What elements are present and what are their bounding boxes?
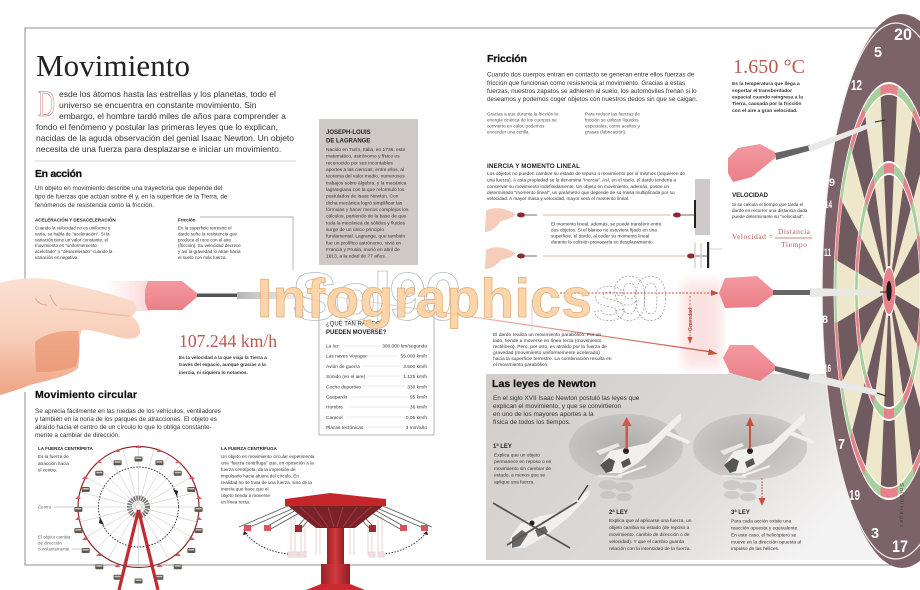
speed table rows: La luz xyxy=(326,344,339,350)
intro text: embargo, el hombre tardó miles de años para comprender a xyxy=(59,111,286,121)
direction arrows xyxy=(99,489,178,525)
board numbers: 8 xyxy=(822,314,828,326)
board numbers: 3 xyxy=(871,525,879,542)
newton intro: física de todos los tiempos. xyxy=(493,419,571,426)
Lagrange heading: DE LAGRANGE xyxy=(326,138,370,144)
Lagrange biography: Nacido en Turín, Italia, en 1736, este xyxy=(326,147,405,153)
segunda ley: 2ª LEY xyxy=(609,509,628,516)
speed table rows: 300.000 km/segundo xyxy=(382,344,427,350)
speed table rows: 55.000 km/h xyxy=(401,354,427,360)
newton intro: En el siglo XVII Isaac Newton postuló las leyes que xyxy=(493,395,640,402)
aceleración column: variación tiene un valor constante, el xyxy=(35,238,108,242)
fricción column: Fricción xyxy=(178,218,196,222)
primera ley: 1ª LEY xyxy=(493,443,512,450)
speed table rows: 3.500 km/h xyxy=(403,364,427,370)
intro text: necesita de una fuerza para desplazarse e iniciar un movimiento. xyxy=(36,144,281,154)
centrífuga heading: LA FUERZA CENTRÍFUGA xyxy=(221,444,278,451)
en acción body: tipo de fuerzas que actúan sobre él y, en la superficie de la Tierra, de xyxy=(35,194,228,200)
rim red ticks xyxy=(75,445,202,567)
target block xyxy=(695,179,710,235)
velocidad text: dardo en recorrer una distancia dada xyxy=(732,208,808,213)
centrífuga text: realidad no se trata de una fuerza, sino de la xyxy=(221,480,312,485)
en acción body: Un objeto en movimiento describe una trayectoria que depende del xyxy=(35,185,222,192)
arrow: heli up 2 xyxy=(746,417,754,449)
Lagrange biography: reconocido por sus incontables xyxy=(326,160,393,166)
board numbers: 5 xyxy=(874,44,882,61)
speed table rows: Las naves Voyager xyxy=(326,354,367,360)
inercia body: determinado "momento lineal", un parámetro que depende de su masa multiplicada por su xyxy=(487,190,675,195)
Lagrange biography: fórmulas y hacer menos complejos los xyxy=(326,207,409,213)
fricción column: dardo sufre la resistencia que xyxy=(178,232,238,236)
segunda ley: movimiento, cambio de dirección o de xyxy=(609,532,690,538)
aceleración column: acelerado" o "desacelerado" cuando la xyxy=(35,249,113,254)
panel: qué tan rápido pueden moverse xyxy=(319,305,434,435)
parabolic text: rectilíneo). Pero, por otro, es atraído por la fuerza de xyxy=(493,344,607,350)
inercia body: velocidad. A mayor masa y velocidad, mayor será el momento lineal. xyxy=(487,196,629,201)
speed table rows: 95 km/h xyxy=(410,394,427,400)
centrífuga text: en línea recta. xyxy=(221,500,250,504)
fricción body: fricción que funcionan como resistencia al movimiento. Gracias a estas xyxy=(487,80,685,87)
fricción column: y así la gravedad lo atrae hacia xyxy=(178,249,241,254)
Lagrange biography: toda la mecánica de sólidos y fluidos xyxy=(326,220,405,226)
velocidad formula: Tiempo xyxy=(781,240,807,249)
fricción column: En la superficie terrestre el xyxy=(178,226,232,230)
spokes xyxy=(78,447,198,567)
Lagrange heading: JOSEPH-LOUIS xyxy=(326,130,371,136)
velocidad formula xyxy=(732,227,812,249)
board numbers: 16 xyxy=(824,363,831,375)
aceleración column: movimiento es "uniformemente xyxy=(35,243,97,248)
dart: middle xyxy=(719,276,889,308)
parabolic text: hacia la superficie terrestre. La combinación resulta en xyxy=(493,356,612,362)
speed table rows: Hombre xyxy=(326,405,343,411)
fricción note right: grasas (lubricación). xyxy=(585,130,626,134)
speed table rows: Coche deportivo xyxy=(326,384,361,390)
speed table rows: 330 km/h xyxy=(407,384,427,390)
column and base xyxy=(327,525,344,565)
heading: las leyes de Newton: Las leyes de Newton xyxy=(492,378,596,390)
temperature caption: con el aire a gran velocidad. xyxy=(732,108,798,114)
watermark outline: Sol90 xyxy=(292,259,462,335)
board numbers: 14 xyxy=(825,199,832,211)
hub xyxy=(130,498,148,516)
speed table rows: 36 km/h xyxy=(410,405,427,411)
board numbers: 17 xyxy=(892,537,908,556)
centro label: Centro xyxy=(38,504,52,510)
centrífuga text: una "fuerza centrífuga" que, en oposición a la xyxy=(221,460,314,466)
ghost chairs xyxy=(288,515,384,557)
fricción body: Cuando dos cuerpos entran en contacto se generan entre ellos fuerzas de xyxy=(487,72,695,78)
seats xyxy=(244,525,428,532)
newton intro: explican el movimiento, y que se convirtieron xyxy=(493,403,622,410)
newton intro: en uno de los mayores aportes a la xyxy=(493,411,594,418)
board numbers: 11 xyxy=(824,247,831,259)
bowl xyxy=(288,506,383,528)
panel: Lagrange xyxy=(319,119,418,265)
parabolic text: el movimiento parabólico. xyxy=(493,362,548,368)
momentum transfer text: superficie, el dardo, al ceder su momento lineal xyxy=(551,234,649,238)
swing ride xyxy=(239,493,432,590)
watermark: Infographics xyxy=(257,267,592,329)
fricción body: deseamos y podemos coger objetos con nuestros dedos sin que se caigan. xyxy=(487,96,698,103)
speed table rows: 0,05 km/h xyxy=(406,415,427,421)
speed table heading: ¿QUÉ TAN RÁPIDO xyxy=(326,320,381,328)
fricción column: el suelo con más fuerza. xyxy=(178,255,227,260)
tercera ley: reacción opuesta y equivalente. xyxy=(731,526,798,532)
Lagrange biography: Francia y Prusia, murió en abril de xyxy=(326,247,400,253)
primera ley: aplique una fuerza. xyxy=(494,480,535,486)
momentum transfer text: durante la colisión provocaría su desplazamiento. xyxy=(551,240,654,244)
earth speed caption: Es la velocidad a la que viaja la Tierra a xyxy=(179,355,267,360)
velocidad text: Si se calcula el tiempo que tarda el xyxy=(732,202,803,207)
icon: helicopter reaction xyxy=(693,413,814,501)
heading: inercia: INERCIA Y MOMENTO LINEAL xyxy=(487,163,580,170)
centrífuga text: fuerza centrípeta, da la impresión de xyxy=(221,467,296,472)
gondolas xyxy=(74,456,203,584)
Lagrange biography: aportes a las ciencias, entre ellos, al xyxy=(326,167,404,173)
intro text: universo se encuentra en constante movimiento. Sin xyxy=(59,100,257,110)
inercia body: Los objetos no pueden cambiar su estado de reposo o movimiento por sí mismos (requieren de xyxy=(487,171,685,176)
centrífuga text: objeto tienda a moverse xyxy=(221,493,270,498)
centrípeta text: atracción hacia xyxy=(38,461,69,466)
parabolic text: lado, tiende a moverse en línea recta (movimiento xyxy=(493,338,602,344)
speed table heading: PUEDEN MOVERSE? xyxy=(326,330,387,336)
speed table rows: Caracol xyxy=(326,415,343,421)
intro text: nacidas de la aguda observación del genial Isaac Newton. Un objeto xyxy=(36,133,294,143)
Lagrange biography: fundamental. Lagrange, que también xyxy=(326,234,405,240)
fricción note left: encender una cerilla. xyxy=(487,130,530,134)
board numbers: 19 xyxy=(849,487,860,504)
temperature caption: soportar el transbordador xyxy=(732,88,792,94)
velocidad text: puede determinarse su "velocidad". xyxy=(732,214,804,219)
circular body: mente a cambiar de dirección. xyxy=(35,432,120,439)
primera ley: movimiento sin cambiar de xyxy=(494,466,551,472)
aceleración column: Cuando la velocidad no es uniforme y xyxy=(35,226,111,230)
centrífuga text: impulsarlo hacia afuera del círculo. En xyxy=(221,474,299,478)
credit: Sol90images xyxy=(898,483,904,527)
parabolic text: El dardo realiza un movimiento parabólico. Por un xyxy=(493,332,601,338)
panel: las leyes de Newton background xyxy=(486,374,897,560)
temperature caption: Tierra, causada por la fricción xyxy=(732,101,802,107)
earth speed caption: inercia, ni siquiera lo notamos. xyxy=(179,370,248,375)
Lagrange biography: teorema del valor medio, numerosos xyxy=(326,174,405,180)
dart: upper xyxy=(728,120,885,182)
aceleración column: variación es negativa. xyxy=(35,255,79,260)
watermark outline xyxy=(292,259,668,335)
value: 1.650 °C xyxy=(732,56,805,114)
fricción note left: convierte en calor, podemos xyxy=(487,124,545,128)
en acción body: fenómenos de resistencia como la fricción. xyxy=(35,202,154,209)
board numbers xyxy=(822,25,912,556)
velocidad heading: VELOCIDAD xyxy=(732,192,769,199)
fricción note right: fricción se utilizan líquidos xyxy=(585,118,639,122)
small dart top xyxy=(517,212,694,218)
centrífuga text: inercia que hace que el xyxy=(221,486,269,492)
arms xyxy=(239,506,432,530)
segunda ley: relación con la intensidad de la fuerza. xyxy=(609,546,691,552)
segunda ley: objeto cambia su estado (de reposo a xyxy=(609,525,690,531)
hand xyxy=(0,278,140,395)
dotted swing arcs xyxy=(245,533,426,554)
board numbers: 7 xyxy=(838,436,845,453)
speed table rows xyxy=(326,344,427,431)
arrow: heli up 1 xyxy=(622,417,632,449)
heading: en acción: En acción xyxy=(35,168,82,180)
Lagrange biography: trabajos sobre álgebra, y la mecánica xyxy=(326,180,407,186)
fricción note right: especiales, como aceites y xyxy=(585,124,641,128)
support legs xyxy=(119,510,158,590)
section: inercia y momento lineal xyxy=(485,163,722,269)
speed table rows: Guepardo xyxy=(326,394,348,400)
centrípeta heading: LA FUERZA CENTRÍPETA xyxy=(38,444,94,451)
centrífuga text: Un objeto en movimiento circular experimenta xyxy=(221,454,315,459)
centrípeta text: el centro. xyxy=(38,468,57,472)
primera ley: Explica que un objeto xyxy=(494,452,540,458)
value: 107.244 km/h: 107.244 km/h xyxy=(179,331,277,351)
primera ley: estado, a menos que se xyxy=(494,472,546,478)
velocidad formula: Velocidad = xyxy=(732,232,773,241)
Lagrange biography: matemático, astrónomo y físico es xyxy=(326,154,400,160)
Lagrange biography: fue un prolífico astrónomo, vivió en xyxy=(326,240,401,246)
dartboard xyxy=(822,14,920,568)
Lagrange biography: cálculos, partiendo de la base de que xyxy=(326,214,407,220)
parabolic text: gravedad (movimiento uniformemente acelerado) xyxy=(493,350,600,356)
watermark outline: s90 xyxy=(592,265,668,334)
speed table rows: Placas tectónicas xyxy=(326,425,364,431)
fricción body: fuerzas, nuestros zapatos se adhieren al suelo, los automóviles frenan si lo xyxy=(487,88,697,95)
title: Movimiento xyxy=(36,48,190,83)
section: las leyes de Newton xyxy=(492,378,814,552)
speed table rows: 3 mm/año xyxy=(406,425,427,431)
Lagrange biography: lagrangiana con la que reformuló los xyxy=(326,187,405,193)
dart: lower xyxy=(723,345,886,396)
inercia body: conservar su movimiento indefinidamente. Un objeto en movimiento, además, posee un xyxy=(487,184,670,189)
tercera ley: mueve en la dirección opuesta al xyxy=(731,540,801,546)
tercera ley: En este caso, el helicóptero se xyxy=(731,532,797,538)
dart thrown with motion trail xyxy=(105,281,332,311)
circular body: atraído hacia el centro de un círculo lo que lo obliga constante- xyxy=(35,424,212,431)
arrow: gravedad: Gravedad xyxy=(688,308,694,331)
fricción note left: energía cinética de los cuerpos se xyxy=(487,118,557,122)
parabolic leader line xyxy=(531,300,533,330)
speed table rows: 1.125 km/h xyxy=(403,374,427,380)
tercera ley: Para cada acción existe una xyxy=(731,518,792,524)
canopy xyxy=(285,493,386,506)
centrípeta text: Es la fuerza de xyxy=(38,454,69,459)
ferris wheel xyxy=(54,445,203,590)
primera ley: permanece en reposo o en xyxy=(494,459,552,465)
pink motion trail right xyxy=(682,282,722,367)
value: 107.244 km/h xyxy=(179,331,277,375)
dotted direction circle xyxy=(98,467,178,547)
Lagrange biography: surge de un único principio xyxy=(326,227,384,233)
rim xyxy=(78,446,199,568)
aceleración column: ACELERACIÓN Y DESACELERACIÓN xyxy=(35,216,116,222)
heading: fricción: Fricción xyxy=(487,53,527,65)
intro text: esde los átomos hasta las estrellas y los planetas, todo el xyxy=(59,89,276,99)
object label: constantemente xyxy=(38,546,70,552)
value: 1.650 °C: 1.650 °C xyxy=(733,56,805,78)
board numbers: 9 xyxy=(829,177,835,189)
tercera ley: impulso de las hélices. xyxy=(731,546,779,552)
fricción column: (fricción). Su velocidad decrece xyxy=(178,243,241,248)
drop cap: D xyxy=(38,84,55,125)
speed table rows: Sonido (en el aire) xyxy=(326,374,366,380)
fricción note right: Para reducir las fuerzas de xyxy=(585,112,640,116)
fricción column: produce el roce con el aire xyxy=(178,238,232,242)
heading: movimiento circular: Movimiento circular xyxy=(35,389,137,401)
segunda ley: Explica que al aplicarse una fuerza, un xyxy=(609,518,692,524)
section: fricción xyxy=(487,53,698,134)
icon: small hand bottom xyxy=(485,247,515,269)
inercia body: una fuerza). A esta propiedad se la denomina "inercia". Así, en el vacío, el dardo tendería a xyxy=(487,178,677,182)
Lagrange biography: dicha mecánica logró simplificar las xyxy=(326,200,403,206)
Lagrange biography: postulados de Isaac Newton. Con xyxy=(326,194,399,200)
earth speed caption: través del espacio, aunque gracias a la xyxy=(179,362,266,367)
intro text: fondo el fenómeno y postular las primeras leyes que lo explican, xyxy=(36,122,278,132)
speed table rows: Avión de guerra xyxy=(326,364,360,370)
aceleración column: varía, se habla de "aceleración". Si la xyxy=(35,232,110,236)
momentum transfer text: dos objetos. Si el blanco no estuviera fijado en una xyxy=(551,228,657,232)
circular body: y también en la noria de los parques de atracciones. El objeto es xyxy=(35,416,217,423)
section: movimiento circular xyxy=(35,389,316,552)
segunda ley: velocidad). Y que el cambio guarda xyxy=(609,539,684,545)
icon: landed helicopter xyxy=(493,485,590,548)
velocidad formula: Distancia xyxy=(778,227,811,236)
fricción leader line xyxy=(200,217,293,270)
board numbers: 20 xyxy=(894,25,912,44)
tercera ley: 3ª LEY xyxy=(731,509,750,516)
object label: El objeto cambia xyxy=(38,534,71,540)
board numbers: 12 xyxy=(851,77,862,94)
temperature caption: Es la temperatura que llega a xyxy=(732,81,800,87)
arrow: heli down xyxy=(758,478,766,506)
fricción note left: Gracias a que durante la fricción la xyxy=(487,112,558,116)
small dart bottom xyxy=(517,242,722,268)
object label: de dirección xyxy=(38,540,62,546)
arrow: parabolic trajectory xyxy=(330,296,718,355)
icon: small hand top xyxy=(485,208,515,232)
momentum transfer text: El momento lineal, además, se puede transferir entre xyxy=(551,222,662,226)
Lagrange biography: 1813, a la edad de 77 años. xyxy=(326,254,386,260)
velocidad block xyxy=(732,192,812,249)
arrow: gravedad xyxy=(688,296,694,344)
section: en acción xyxy=(35,168,293,270)
arrow: straight trajectory xyxy=(560,290,719,296)
icon: helicopter rising xyxy=(569,413,690,501)
circular body: Se aprecia fácilmente en las ruedas de los vehículos, ventiladores xyxy=(35,408,221,415)
temperature caption: espacial cuando reingresa a la xyxy=(732,94,803,100)
